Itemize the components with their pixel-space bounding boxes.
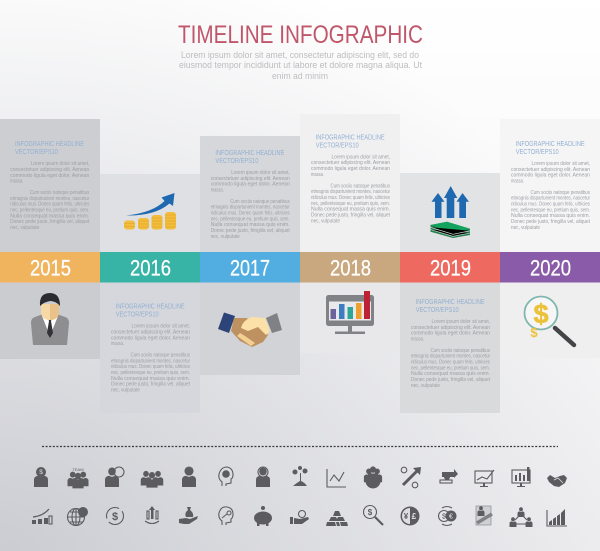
text block: 2017: massa. [211,188,224,194]
text block: 2020: Cum sociis natoque penatibus [530,190,590,196]
icon: search money [364,506,383,525]
icon: dollar cycle: $ [112,511,118,523]
text block: 2015: INFOGRAPHIC HEADLINE [15,139,84,148]
text block: 2020: ridiculus mus. Donec quam felis, ultricies [511,202,590,208]
icon row 1 [34,466,567,488]
icon: resume card [476,506,492,525]
icon: piggy bank [254,506,272,526]
text block: 2015: Cum sociis natoque penatibus [30,190,90,196]
timeline band: 2019 [430,256,471,280]
timeline band: 2015 [30,256,71,280]
intro text [179,50,422,81]
text block: 2017: VECTOR/EPS10 [215,156,258,165]
icon: head with gear [219,467,233,486]
text block: 2016: Cum sociis natoque penatibus [130,353,190,359]
text block: 2017 [211,148,290,240]
icon: dollar cycle [106,508,124,524]
icon: monitor with bar chart [326,291,374,334]
icon: head with key [219,507,233,525]
text block: 2016: ridiculus mus. Donec quam felis, ultricies [111,364,190,370]
icon: money exchange [440,469,458,483]
icon: person with target [256,467,270,487]
panel: 2016 upper [100,174,200,252]
icon: magnifier with dollar: $ [530,325,538,340]
icon: coins and rising arrow [124,193,176,230]
icon: line chart [327,469,346,487]
icon: dollar euro exchange: € [449,514,453,520]
panel: 2019 lower [400,282,500,413]
icon: magnifier with dollar: $ [533,299,549,329]
text block: 2017: consectetuer adipiscing elit. Aenean [211,176,290,182]
panel: 2020 lower [500,282,600,358]
text block: 2016 [111,302,191,394]
text block: 2015: VECTOR/EPS10 [15,147,58,156]
text block: 2019: massa. [411,337,424,343]
text block: 2020: VECTOR/EPS10 [516,147,559,156]
icon: globe with dollar [68,507,88,526]
text block: 2018: massa. [311,172,324,178]
text block: 2019: commodo ligula eget dolor. Aenean [411,331,490,337]
text block: 2017: Cum sociis natoque penatibus [230,199,290,205]
text block: 2019: etmagnis dispartunient montes, nascetur [411,354,490,360]
icon row 2 [32,506,567,527]
icon: magnifier with dollar [524,296,574,345]
intro text: eiusmod tempor incididunt ut labore et dolore magna aliqua. Ut [179,60,422,70]
text block: 2019: Donec pede justo, fringilla vel, aliquet [411,377,491,383]
text block: 2018: Donec pede justo, fringilla vel, aliquet [311,212,391,218]
icon: yen pound coin [400,506,420,526]
text block: 2016: Lorem ipsum dolor sit amet, [132,324,190,330]
text block: 2016: etmagnis dispartunient montes, nascetur [111,358,190,364]
icon: monitor bars [512,467,530,487]
icon: handshake [218,312,282,347]
text block: 2016: INFOGRAPHIC HEADLINE [116,302,185,311]
text block: 2017: ridiculus mus. Donec quam felis, ultricies [211,210,290,216]
icon: person with clock [105,467,124,487]
text block: 2016: massa. [111,341,124,347]
icon: yen pound coin: £ [412,512,417,521]
text block: 2020: nec, pellentesque eu, pretium quis, sem. [511,207,590,213]
text block: 2020: Lorem ipsum dolor sit amet, [532,161,590,167]
panel: 2017 upper [200,136,300,252]
text block: 2018 [311,132,391,224]
text block: 2018: nec, pellentesque eu, pretium quis, sem. [311,201,390,207]
timeline band: 2018 [330,256,371,280]
text block: 2018: INFOGRAPHIC HEADLINE [316,132,385,141]
text block: 2017: nec, vulputate [211,234,240,240]
text block: 2016: nec, pellentesque eu, pretium quis, sem. [111,370,190,376]
icon: monitor trend [475,470,494,487]
text block: 2020: commodo ligula eget dolor. Aenean [511,173,590,179]
text block: 2015: massa. [10,179,23,185]
text block: 2019: nec, pellentesque eu, pretium quis, sem. [411,365,490,371]
intro text: Lorem ipsum dolor sit amet, consectetur adipiscing elit, sed do [181,50,419,60]
text block: 2016: commodo ligula eget dolor. Aenean [111,335,190,341]
intro text: enim ad minim [272,71,328,81]
icon: businessman [31,293,69,345]
timeline band: 2020 [530,256,571,280]
panel: 2018 upper [300,114,400,252]
text block: 2018: etmagnis dispartunient montes, nascetur [311,189,390,195]
icon: yen pound coin: ¥ [404,512,409,521]
text block: 2017: nec, pellentesque eu, pretium quis, sem. [211,216,290,222]
text block: 2018: commodo ligula eget dolor. Aenean [311,166,390,172]
icon: hand with coin [290,510,309,524]
text block: 2019: consectetuer adipiscing elit. Aenean [411,325,490,331]
icon: group [141,471,163,488]
divider: dotted line [42,446,558,448]
icon: growth bars [547,509,567,526]
icon: team: TEAM [72,467,84,472]
icon: dollar euro exchange [438,506,456,526]
icon: gold bars [326,511,348,526]
text block: 2018: Lorem ipsum dolor sit amet, [332,154,390,160]
text block: 2015: etmagnis dispartunient montes, nascetur [10,196,90,202]
icon: small handshake [547,475,567,487]
text block: 2015: Lorem ipsum dolor sit amet, [31,161,89,167]
icon: arrows from hands [145,506,159,524]
text block: 2018: Cum sociis natoque penatibus [330,183,390,189]
panel: 2015 upper [0,119,100,252]
icon: global team [364,466,382,488]
icon: arrows and money [430,186,470,238]
text block: 2019: ridiculus mus. Donec quam felis, ultricies [411,360,490,366]
text block: 2020: etmagnis dispartunient montes, nascetur [511,196,590,202]
text block: 2020: consectetuer adipiscing elit. Aenean [511,167,590,173]
icon: dollar head: $ [39,469,43,476]
text block: 2020: Donec pede justo, fringilla vel, aliquet [511,219,591,225]
text block: 2016: Donec pede justo, fringilla vel, aliquet [111,382,191,388]
text block: 2020: nec, vulputate [511,225,540,231]
text block: 2019: Cum sociis natoque penatibus [430,348,490,354]
text block: 2019: VECTOR/EPS10 [416,305,459,314]
icon: search money: $ [368,508,373,517]
panel: 2020 upper [500,119,600,252]
text block: 2015: nec, vulputate [10,225,39,231]
timeline band: 2016 [130,256,171,280]
text block: 2017: Donec pede justo, fringilla vel, aliquet [211,228,290,234]
icon: dollar euro exchange: $ [442,514,446,520]
text block: 2019: Nulla consequat massa quis enim. [411,371,490,377]
text block: 2017: INFOGRAPHIC HEADLINE [215,148,284,157]
icon: growth coins [32,509,52,524]
text block: 2018: nec, vulputate [311,218,340,224]
text block: 2017: Lorem ipsum dolor sit amet, [231,170,290,176]
text block: 2015: consectetuer adipiscing elit. Aenean [10,167,90,173]
panel: 2016 lower [100,282,200,413]
panel: 2015 lower [0,282,100,359]
panel: 2019 upper [400,173,500,252]
text block: 2016: VECTOR/EPS10 [116,310,159,319]
text block: 2015: commodo ligula eget dolor. Aenean [10,173,90,179]
text block: 2017: Nulla consequat massa quis enim. [211,222,290,228]
text block: 2018: Nulla consequat massa quis enim. [311,207,390,213]
text block: 2015 [10,139,90,231]
text block: 2015: Donec pede justo, fringilla vel, aliquet [10,219,90,225]
text block: 2019: nec, vulputate [411,383,440,389]
text block: 2016: Nulla consequat massa quis enim. [111,376,190,382]
text block: 2017: etmagnis dispartunient montes, nascetur [211,205,290,211]
text block: 2019: Lorem ipsum dolor sit amet, [432,319,490,325]
icon: currency arrow [401,467,421,488]
text block: 2018: ridiculus mus. Donec quam felis, ultricies [311,195,390,201]
text block: 2016: consectetuer adipiscing elit. Aenean [111,330,190,336]
panel: 2017 lower [200,282,300,375]
text block: 2016: nec, vulputate [111,388,140,394]
text block: 2019 [411,297,491,389]
timeline band [0,252,600,282]
icon: plant with coins [292,466,308,486]
text block: 2017: commodo ligula eget dolor. Aenean [211,182,290,188]
text block: 2015: ridiculus mus. Donec quam felis, ultricies [10,202,90,208]
title: TIMELINE INFOGRAPHIC [178,21,423,49]
text block: 2020 [511,139,591,231]
icon: team [68,467,88,488]
text block: 2020: massa. [511,179,524,185]
text block: 2018: consectetuer adipiscing elit. Aenean [311,160,390,166]
text block: 2015: Nulla consequat massa quis enim. [10,213,89,219]
panel: 2018 lower [300,282,400,353]
timeline band: 2017 [230,256,270,280]
icon: dollar head [34,467,48,487]
text block: 2019: INFOGRAPHIC HEADLINE [416,297,485,306]
text block: 2015: nec, pellentesque eu, pretium quis, sem. [10,208,89,214]
icon: idea person [182,467,196,487]
text block: 2018: VECTOR/EPS10 [316,140,359,149]
text block: 2020: Nulla consequat massa quis enim. [511,213,590,219]
icon: hand with money bag [179,507,198,524]
icon: network people [510,507,532,527]
